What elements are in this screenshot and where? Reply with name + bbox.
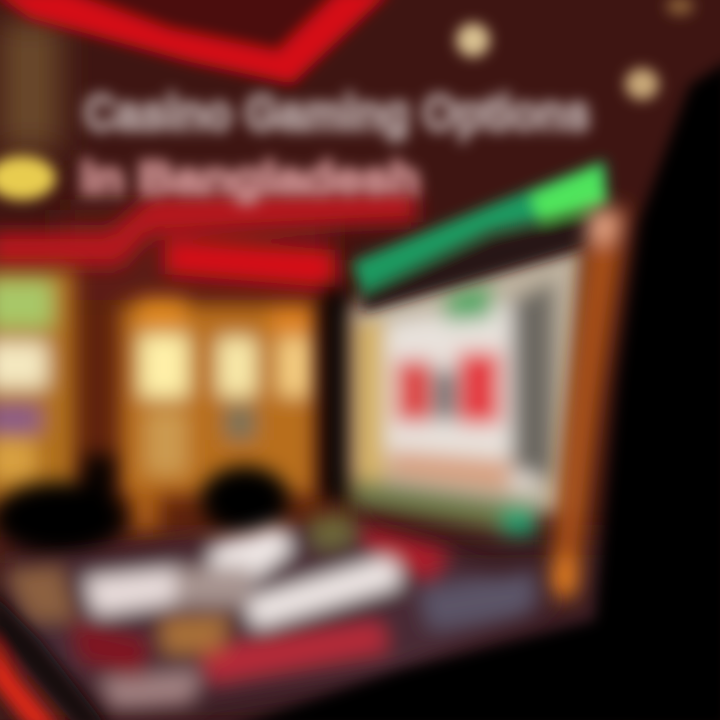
- gaming table: [0, 513, 560, 710]
- green machine topper: [352, 160, 608, 312]
- centre slot machines: [120, 298, 315, 530]
- red band under title: [0, 190, 418, 288]
- main slot machine: [350, 245, 585, 535]
- dark silhouettes: [0, 290, 350, 554]
- title: in Bangladesh: [80, 152, 420, 204]
- left slot machine: [0, 270, 75, 505]
- orange machine side: [548, 205, 628, 600]
- red floor curve: [0, 590, 110, 720]
- black foreground cabinet: [225, 60, 720, 720]
- title: Casino Gaming Options: [84, 85, 590, 141]
- ceiling lights: [0, 0, 694, 200]
- title: [80, 85, 590, 204]
- red ceiling trim: [0, 0, 392, 84]
